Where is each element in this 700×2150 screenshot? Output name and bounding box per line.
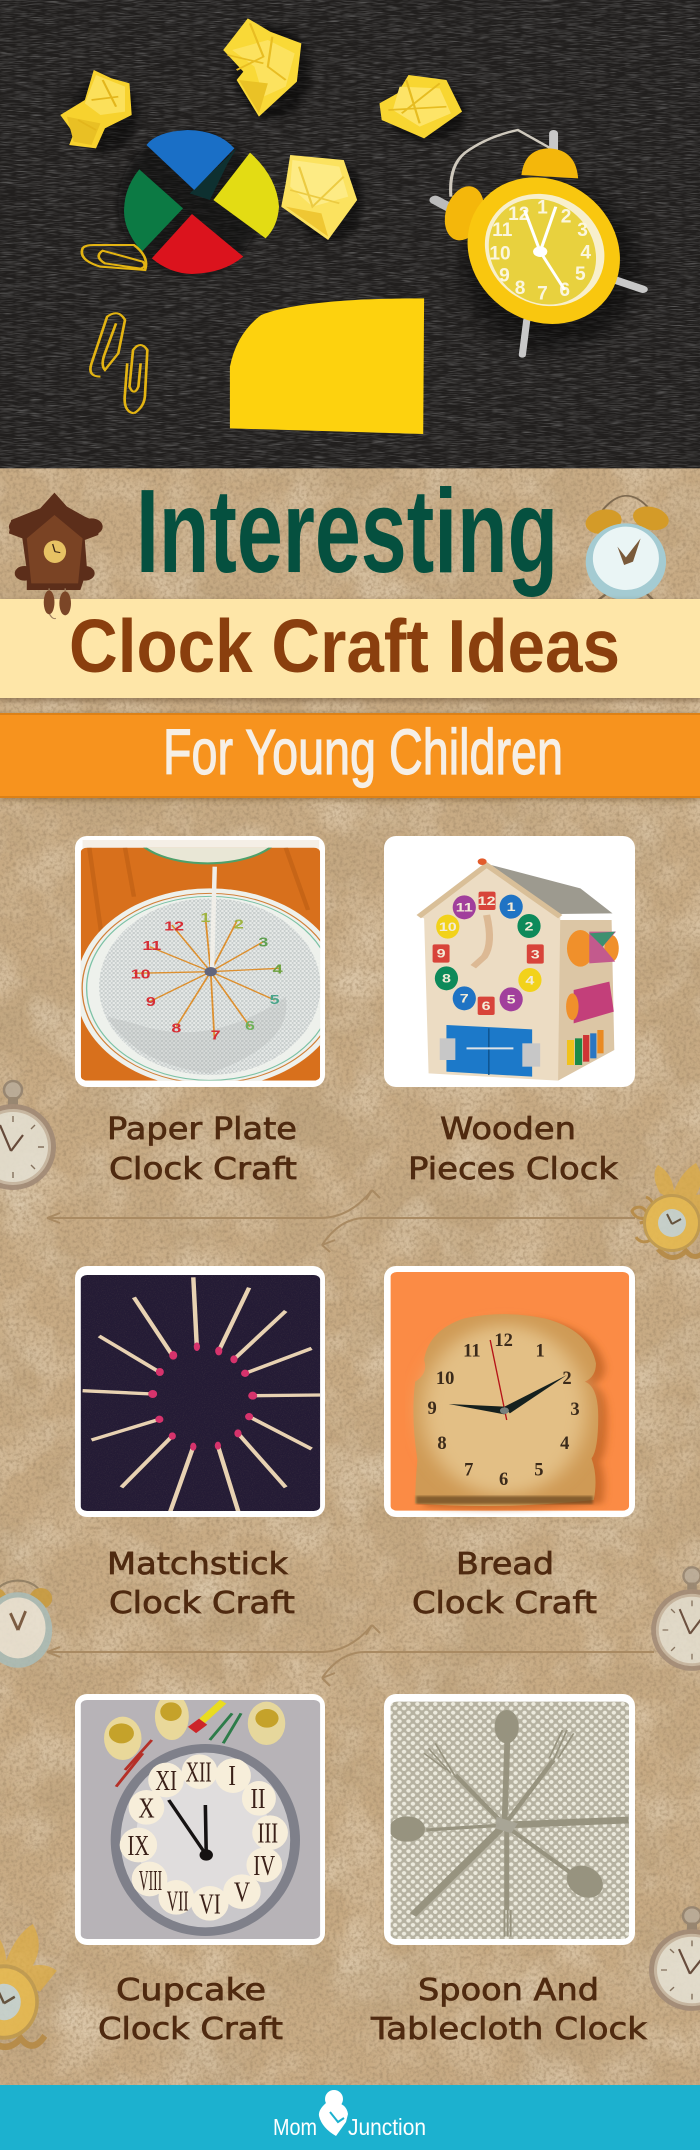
photo: stitched paper plate [80, 840, 320, 1081]
label: Wooden Pieces Clock: Wooden [440, 1112, 576, 1147]
card: bread clock [384, 1266, 635, 1517]
photo: wooden busy house: 4 [525, 974, 535, 988]
yellow alarm clock: 12 [508, 204, 529, 225]
photo: wooden busy house: 9 [437, 948, 446, 961]
photo: stitched paper plate: 7 [211, 1028, 221, 1043]
photo: cupcakes on silver tray: XI [155, 1766, 177, 1797]
label: Cupcake Clock Craft: Cupcake [116, 1973, 266, 2008]
label: Paper Plate Clock Craft: Paper Plate [107, 1112, 297, 1147]
photo: toast clock on orange: 8 [437, 1433, 447, 1454]
logo wordmark: Mom [273, 2114, 317, 2140]
photo: wooden busy house: 5 [507, 994, 516, 1007]
photo: cupcakes on silver tray: II [251, 1784, 266, 1815]
paper clips [82, 245, 147, 413]
photo: cupcakes on silver tray: VI [199, 1889, 221, 1920]
photo: toast clock on orange: 6 [499, 1469, 508, 1490]
label: Matchstick Clock Craft: Clock Craft [109, 1586, 295, 1621]
photo: matchsticks on dark surface [81, 1275, 320, 1513]
photo: stitched paper plate: 5 [270, 993, 280, 1007]
photo: wooden busy house: 8 [442, 973, 451, 986]
photo: cupcakes on silver tray: I [228, 1761, 236, 1792]
photo: toast clock on orange: 7 [464, 1460, 473, 1481]
yellow alarm clock: 6 [559, 280, 570, 301]
photo: wooden busy house: 7 [460, 993, 469, 1006]
orange banner [0, 713, 700, 800]
yellow sticky note [230, 298, 424, 434]
side clock: pocket watch left [0, 1081, 56, 1190]
photo: stitched paper plate: 8 [171, 1022, 182, 1036]
photo: stitched paper plate: 1 [200, 911, 211, 925]
photo: wooden busy house: 3 [531, 948, 540, 962]
photo: cupcakes on silver tray: VII [167, 1886, 189, 1917]
label: Matchstick Clock Craft [107, 1547, 295, 1621]
photo: wooden busy house: 2 [525, 920, 534, 934]
photo: cupcakes on silver tray: X [138, 1793, 155, 1824]
photo: toast clock on orange: 4 [560, 1433, 569, 1454]
card: matchstick clock [75, 1266, 325, 1517]
photo: cupcakes on silver tray: IX [128, 1831, 149, 1862]
photo: toast clock on orange [391, 1272, 629, 1511]
photo: cupcakes on silver tray: VIII [139, 1865, 162, 1896]
photo: stitched paper plate: 11 [142, 939, 161, 953]
label: Wooden Pieces Clock: Pieces Clock [408, 1152, 619, 1187]
subtitle: For Young Children: For Young Children [163, 716, 563, 788]
photo: toast clock on orange: 11 [463, 1341, 481, 1362]
photo: toast clock on orange: 3 [570, 1399, 580, 1420]
side clock: ornate right [632, 1163, 700, 1258]
photo: stitched paper plate: 12 [164, 920, 184, 934]
yellow alarm clock: 3 [577, 220, 588, 241]
card: spoon and tablecloth clock [384, 1694, 635, 1945]
photo: wooden busy house [419, 858, 619, 1081]
card: cupcake clock [75, 1693, 325, 1945]
subtitle: Clock Craft Ideas: Clock Craft Ideas [69, 604, 620, 688]
photo: toast clock on orange: 10 [436, 1368, 454, 1389]
logo: mother and child icon [319, 2090, 348, 2136]
side clock: pocket watch right [651, 1567, 700, 1671]
side clock: alarm left [0, 1581, 52, 1668]
yellow alarm clock: 2 [561, 207, 571, 228]
yellow alarm clock [435, 130, 643, 355]
hero photo: craft supplies on black board [0, 0, 700, 468]
yellow alarm clock: 5 [575, 264, 586, 285]
label: Spoon And Tablecloth Clock: Spoon And [418, 1973, 599, 2008]
photo: toast clock on orange: 1 [536, 1341, 545, 1362]
photo: cupcakes on silver tray: V [234, 1877, 251, 1908]
yellow alarm clock: 7 [537, 283, 548, 304]
photo: wooden busy house: 6 [482, 1000, 491, 1013]
photo: cutlery on woven cloth [389, 1702, 629, 1939]
card: wooden pieces clock [384, 836, 635, 1087]
photo: stitched paper plate: 3 [258, 936, 269, 950]
label: Matchstick Clock Craft: Matchstick [107, 1547, 289, 1582]
label: Cupcake Clock Craft: Clock Craft [98, 2012, 283, 2047]
photo: stitched paper plate: 4 [273, 962, 283, 977]
coloured circle blocks [118, 130, 279, 275]
label: Spoon And Tablecloth Clock [370, 1973, 648, 2047]
divider two [47, 1625, 654, 1686]
logo wordmark [273, 2114, 426, 2140]
yellow alarm clock: 11 [492, 220, 513, 241]
photo: stitched paper plate: 9 [146, 995, 156, 1009]
photo: stitched paper plate: 2 [234, 917, 244, 932]
photo: cupcakes on silver tray: IV [253, 1851, 275, 1882]
yellow alarm clock: 9 [499, 266, 510, 287]
label: Bread Clock Craft: Clock Craft [412, 1586, 597, 1621]
photo: cupcakes on silver tray: XII [186, 1758, 212, 1789]
crumpled paper balls [60, 18, 467, 242]
side clock: ornate left [0, 1924, 57, 2047]
yellow alarm clock: 4 [580, 242, 591, 263]
photo: cupcakes on silver tray: III [258, 1819, 278, 1849]
label: Paper Plate Clock Craft: Clock Craft [109, 1152, 297, 1187]
label: Cupcake Clock Craft [98, 1973, 283, 2047]
label: Spoon And Tablecloth Clock: Tablecloth Clock [370, 2012, 648, 2047]
yellow alarm clock: 8 [515, 278, 526, 299]
label: Paper Plate Clock Craft [107, 1112, 297, 1187]
photo: wooden busy house: 10 [439, 921, 457, 934]
decorative blue alarm clock [580, 496, 674, 605]
photo: stitched paper plate: 6 [245, 1019, 255, 1033]
photo: toast clock on orange: 12 [494, 1330, 513, 1351]
photo: wooden busy house: 11 [456, 902, 473, 915]
photo: toast clock on orange: 2 [562, 1368, 572, 1389]
photo: stitched paper plate: 10 [131, 967, 151, 982]
side clock: pocket watch right bottom [649, 1907, 700, 2011]
footer bar with logo [0, 2085, 700, 2150]
logo wordmark: Junction [348, 2114, 426, 2140]
label: Bread Clock Craft [412, 1547, 597, 1621]
label: Bread Clock Craft: Bread [456, 1547, 554, 1582]
photo: toast clock on orange: 5 [534, 1460, 543, 1481]
photo: cupcakes on silver tray [81, 1693, 320, 1939]
yellow alarm clock: 1 [537, 197, 548, 218]
photo: wooden busy house: 12 [478, 895, 496, 908]
photo: wooden busy house: 1 [507, 901, 516, 914]
label: Wooden Pieces Clock [408, 1112, 619, 1187]
card: paper plate clock [75, 836, 325, 1087]
cream banner [0, 599, 700, 701]
decorative cuckoo clock [9, 493, 103, 619]
yellow alarm clock: 10 [489, 243, 511, 264]
divider one [47, 1190, 635, 1252]
photo: toast clock on orange: 9 [428, 1398, 437, 1419]
